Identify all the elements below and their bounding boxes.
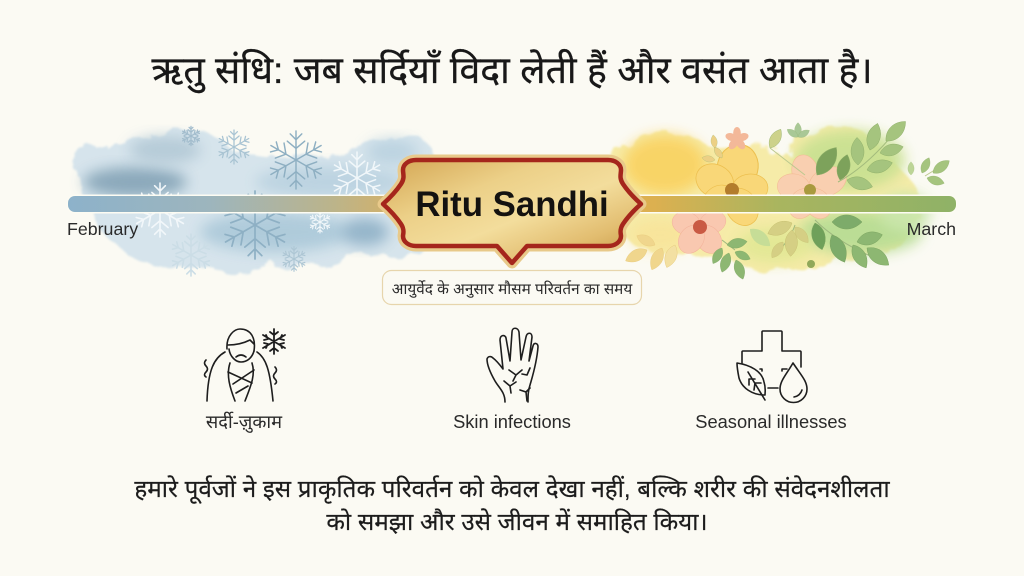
icon: hand with skin cracks (487, 328, 538, 402)
subtitle pill: आयुर्वेद के अनुसार मौसम परिवर्तन का समय (392, 279, 633, 299)
snowflake (331, 152, 383, 204)
snowflake (267, 131, 325, 189)
leaves: lower branches (623, 215, 893, 281)
icon: medical cross with leaf and drop (737, 331, 807, 402)
snowflake (309, 211, 331, 233)
label: March: March (907, 219, 956, 239)
timeline bar (67, 194, 957, 214)
title: ऋतु संधि: जब सर्दियाँ विदा लेती हैं और वसंत आता है। (151, 49, 873, 93)
leaves: upper right branch (701, 117, 952, 193)
snowflake (281, 247, 307, 271)
plaque title: Ritu Sandhi (415, 185, 609, 224)
flower: peach (775, 152, 851, 224)
label: February: February (67, 219, 138, 239)
closing paragraph: हमारे पूर्वजों ने इस प्राकृतिक परिवर्तन को केवल देखा नहीं, बल्कि शरीर की संवेदनशीलता (134, 475, 890, 504)
icon label: skin infections: Skin infections (453, 411, 571, 432)
snowflake (170, 234, 212, 276)
icon label: seasonal illnesses: Seasonal illnesses (695, 411, 847, 432)
snowflake (181, 126, 201, 146)
closing paragraph (134, 475, 890, 536)
snowflake (263, 329, 285, 354)
snowflake (133, 183, 187, 237)
spring watercolor wash with flowers (616, 117, 952, 281)
plaque: Ritu Sandhi (383, 160, 641, 263)
small pink bud (724, 127, 750, 151)
snowflake (217, 130, 251, 164)
icon: person shivering with snowflake (204, 329, 285, 401)
winter watercolor wash with snowflakes (76, 126, 434, 276)
subtitle pill (382, 270, 642, 304)
flower: yellow (690, 140, 769, 232)
flower: coral (670, 198, 729, 258)
closing paragraph: को समझा और उसे जीवन में समाहित किया। (326, 508, 708, 536)
icon label: cold: सर्दी-ज़ुकाम (206, 411, 283, 433)
snowflake (220, 191, 290, 259)
